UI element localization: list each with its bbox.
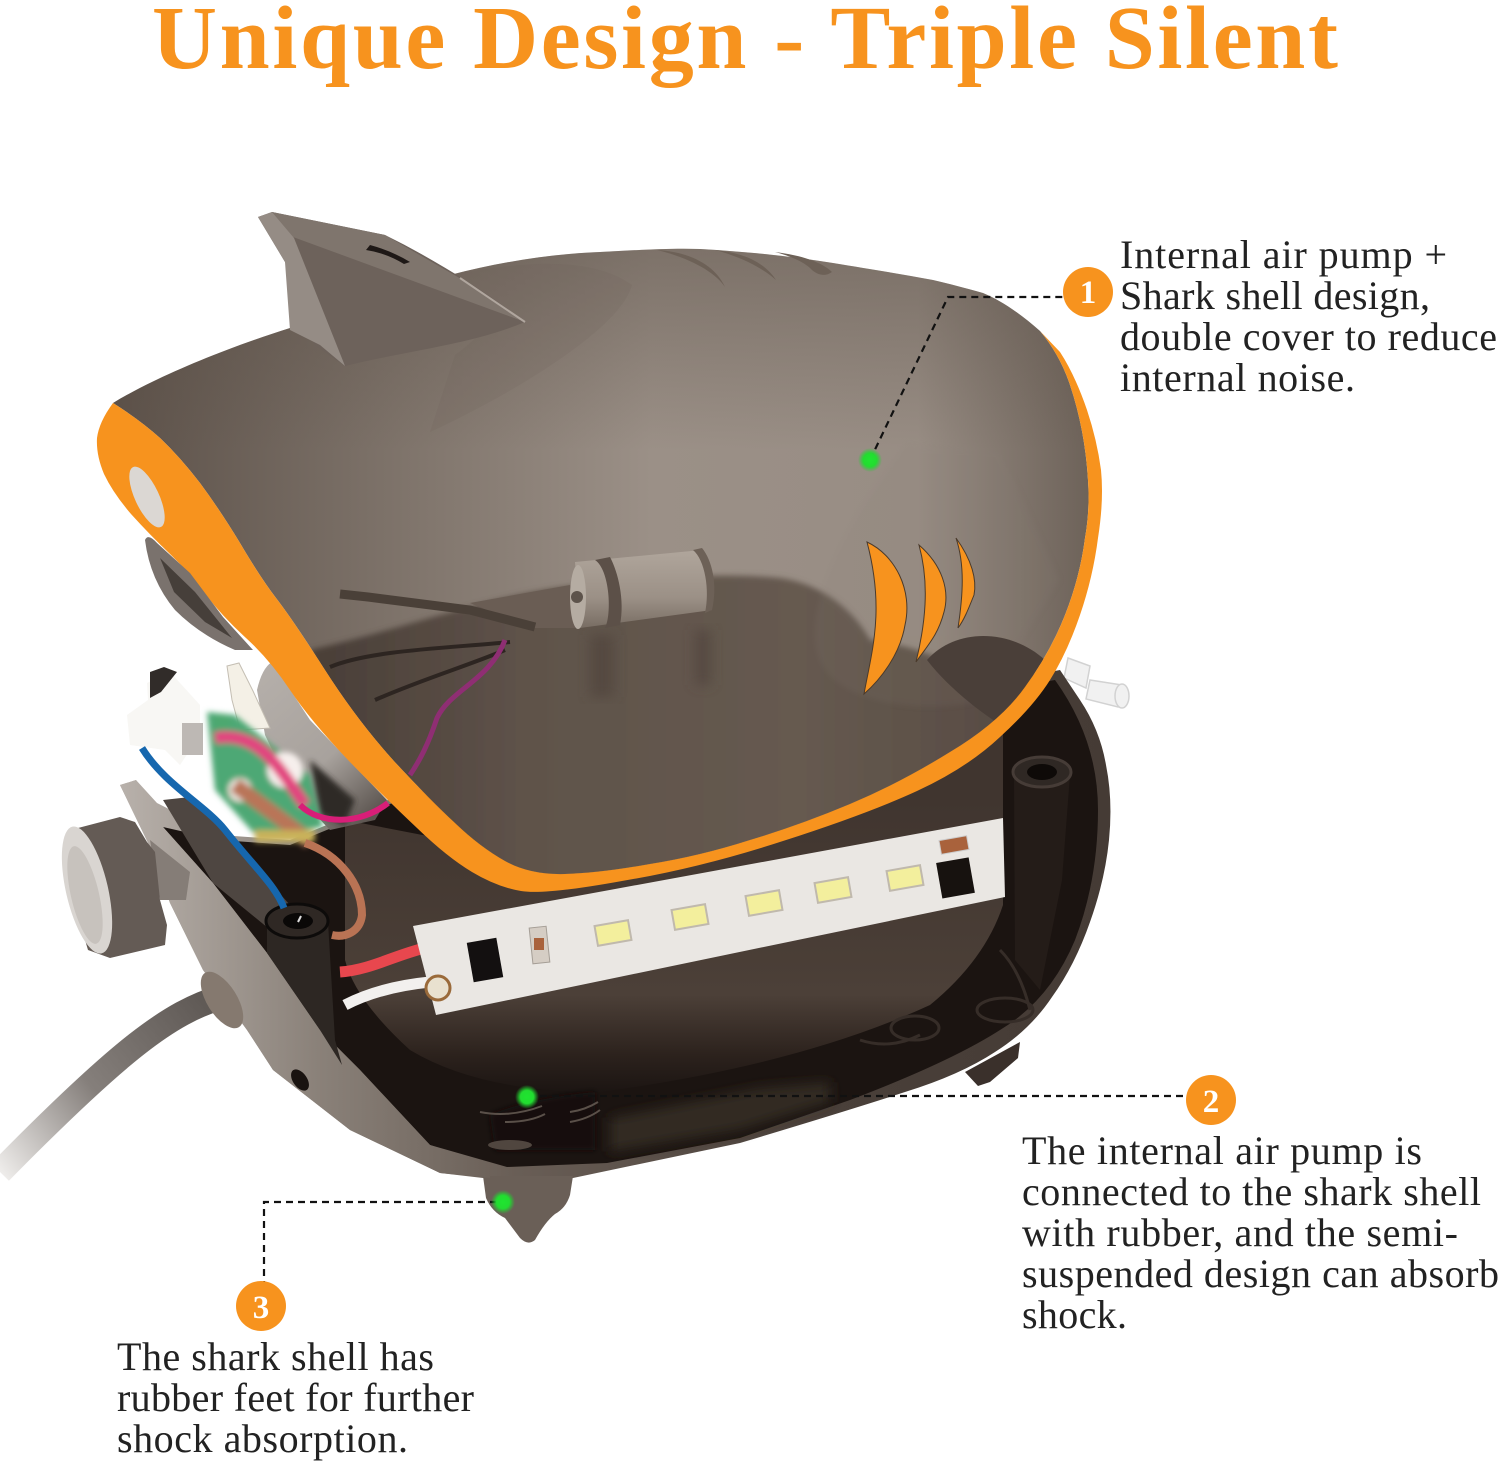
green marker 2 [515, 1085, 539, 1109]
motor shadow [310, 760, 355, 825]
tray interior [163, 680, 1098, 1167]
number badge 1: 1 [1080, 275, 1096, 311]
callout text 1: double cover to reduce [1120, 314, 1497, 359]
fin groove shading [430, 264, 632, 432]
motor metal end [257, 662, 387, 830]
purple wire [410, 640, 505, 775]
cable grommet [192, 965, 252, 1035]
red wire [340, 948, 425, 972]
legs under coil [590, 630, 711, 697]
leader line 3 [264, 1202, 497, 1282]
sleeve through shell [470, 585, 575, 628]
LED strip [413, 818, 1005, 1015]
rear rubber foot [965, 1042, 1020, 1086]
callout text 2: with rubber, and the semi- [1022, 1210, 1458, 1255]
thin dark wires [330, 642, 510, 700]
internal air pump body [345, 700, 1003, 1092]
shell lens hole [122, 462, 172, 532]
callout 1 [858, 232, 1497, 472]
callout text 3: shock absorption. [117, 1416, 408, 1461]
rubber mounts [480, 1092, 600, 1150]
knob [52, 817, 190, 958]
pink wire [300, 803, 388, 820]
callout text 2: shock. [1022, 1292, 1127, 1337]
number badge 2: 2 [1203, 1084, 1219, 1120]
window slot [160, 558, 232, 638]
callout text 3: The shark shell has [117, 1334, 434, 1379]
number badge 2 [1186, 1075, 1236, 1125]
callout text 3 [117, 1334, 474, 1461]
glass component [227, 663, 270, 730]
number badge 1 [1063, 267, 1113, 317]
white wire [345, 982, 430, 1005]
shark shell [90, 212, 1110, 900]
brown wire [305, 843, 362, 936]
fin outline in shell [815, 445, 1060, 707]
callout text 2 [1022, 1128, 1499, 1337]
shell top ridges [657, 250, 832, 287]
orange gill marks [864, 538, 975, 694]
coil component [570, 548, 714, 629]
power cable [0, 997, 222, 1172]
side plate hole [287, 1066, 313, 1094]
front rubber foot [483, 1176, 573, 1243]
callout text 2: suspended design can absorb [1022, 1251, 1499, 1296]
callout text 3: rubber feet for further [117, 1375, 474, 1420]
callout 3 [117, 1190, 515, 1461]
number badge 3 [236, 1281, 286, 1331]
callout text 1: Internal air pump + [1120, 232, 1447, 277]
callout 2 [515, 1075, 1499, 1337]
white connector [127, 667, 203, 765]
blue wire [142, 748, 284, 908]
green marker 3 [491, 1190, 515, 1214]
right standoff post [1013, 757, 1071, 990]
tray floor highlight [610, 1082, 830, 1152]
callout text 1 [1120, 232, 1497, 400]
fitting through shell [927, 636, 1044, 720]
metal side plate [120, 780, 490, 1178]
base tray silhouette [120, 670, 1110, 1178]
callout text 2: The internal air pump is [1022, 1128, 1422, 1173]
tray mount details [860, 950, 1033, 1044]
green marker 1 [858, 448, 882, 472]
leader line 1 [870, 297, 1065, 460]
black wire through shell [340, 594, 535, 627]
bracket behind wires [163, 797, 290, 928]
callout text 1: Shark shell design, [1120, 273, 1430, 318]
left standoff post [266, 904, 342, 1065]
shark fin [258, 212, 525, 366]
right air connector [1064, 658, 1129, 708]
number badge 3: 3 [253, 1290, 269, 1326]
callout text 1: internal noise. [1120, 355, 1355, 400]
pump seen through shell [311, 572, 994, 874]
shell side window [145, 537, 253, 650]
blurred circuit board [207, 712, 323, 842]
callout text 2: connected to the shark shell [1022, 1169, 1481, 1214]
leader line 2 [540, 1095, 1187, 1097]
orange shell rim [97, 331, 1102, 892]
